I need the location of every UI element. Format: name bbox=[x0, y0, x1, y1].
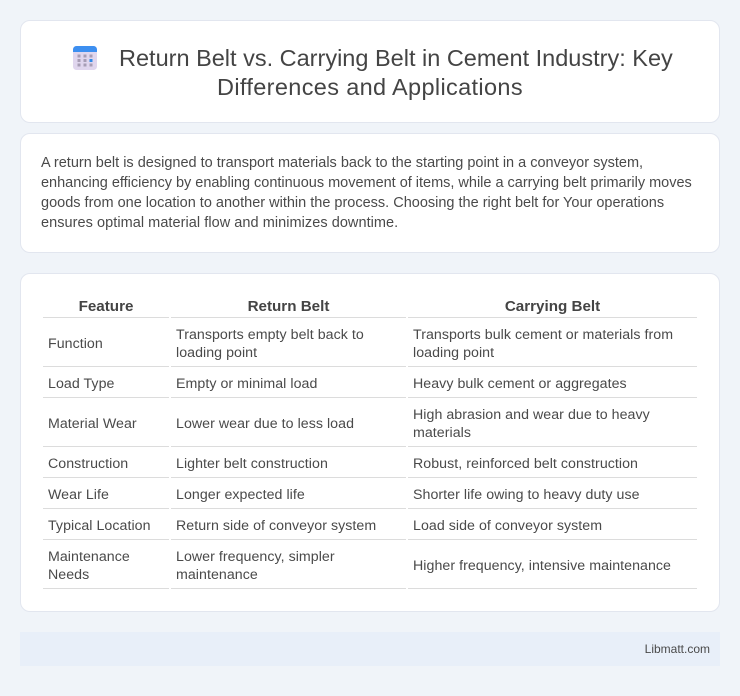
row: Wear Life: Wear Life bbox=[48, 487, 109, 503]
table content: Robust, reinforced belt construction bbox=[413, 456, 638, 472]
row: Maintenance Needs bbox=[48, 549, 130, 583]
row: Function: Function bbox=[48, 336, 103, 352]
intro text bbox=[41, 155, 692, 231]
row: Maintenance Needs: Needs bbox=[48, 567, 89, 583]
table content: Load side of conveyor system bbox=[413, 518, 602, 534]
intro text: A return belt is designed to transport materials back to the starting point in a conveyor system, bbox=[41, 155, 643, 171]
panel: intro bbox=[20, 133, 720, 253]
table content: Longer expected life bbox=[176, 487, 305, 503]
panel: comparison table bbox=[20, 273, 720, 612]
table content: Shorter life owing to heavy duty use bbox=[413, 487, 640, 503]
table content: Lighter belt construction bbox=[176, 456, 328, 472]
title bbox=[119, 45, 673, 100]
row: Load Type: Load Type bbox=[48, 376, 114, 392]
table content: Lower frequency, simpler bbox=[176, 549, 335, 565]
table content: loading point bbox=[176, 345, 257, 361]
row: Typical Location: Typical Location bbox=[48, 518, 151, 534]
table content: Lower wear due to less load bbox=[176, 416, 354, 432]
table content: maintenance bbox=[176, 567, 258, 583]
table content: loading point bbox=[413, 345, 494, 361]
icon: calendar bbox=[73, 46, 97, 70]
intro text: ensures optimal material flow and minimizes downtime. bbox=[41, 215, 398, 231]
table content: Empty or minimal load bbox=[176, 376, 317, 392]
title: Return Belt vs. Carrying Belt in Cement Industry: Key bbox=[119, 45, 673, 71]
table content: materials bbox=[413, 425, 471, 441]
table content: Transports empty belt back to bbox=[176, 327, 364, 343]
table content: Transports bulk cement or materials from bbox=[413, 327, 673, 343]
row: Material Wear: Material Wear bbox=[48, 416, 137, 432]
table content: High abrasion and wear due to heavy bbox=[413, 407, 650, 423]
table content: Higher frequency, intensive maintenance bbox=[413, 558, 671, 574]
footer bbox=[20, 632, 720, 666]
header: Carrying Belt: Carrying Belt bbox=[505, 298, 600, 315]
table content: Heavy bulk cement or aggregates bbox=[413, 376, 627, 392]
intro text: enhancing efficiency by enabling continuous movement of items, while a carrying belt primarily moves bbox=[41, 175, 692, 191]
footer text: Libmatt.com bbox=[645, 642, 710, 656]
header: Return Belt: Return Belt bbox=[248, 298, 329, 315]
header: Feature: Feature bbox=[79, 298, 133, 315]
intro text: goods from one location to another within the process. Choosing the right belt for Your operations bbox=[41, 195, 664, 211]
row: Maintenance Needs: Maintenance bbox=[48, 549, 130, 565]
row: Construction: Construction bbox=[48, 456, 128, 472]
table content: Return side of conveyor system bbox=[176, 518, 376, 534]
title: Differences and Applications bbox=[217, 74, 523, 100]
panel: title card bbox=[20, 20, 720, 123]
